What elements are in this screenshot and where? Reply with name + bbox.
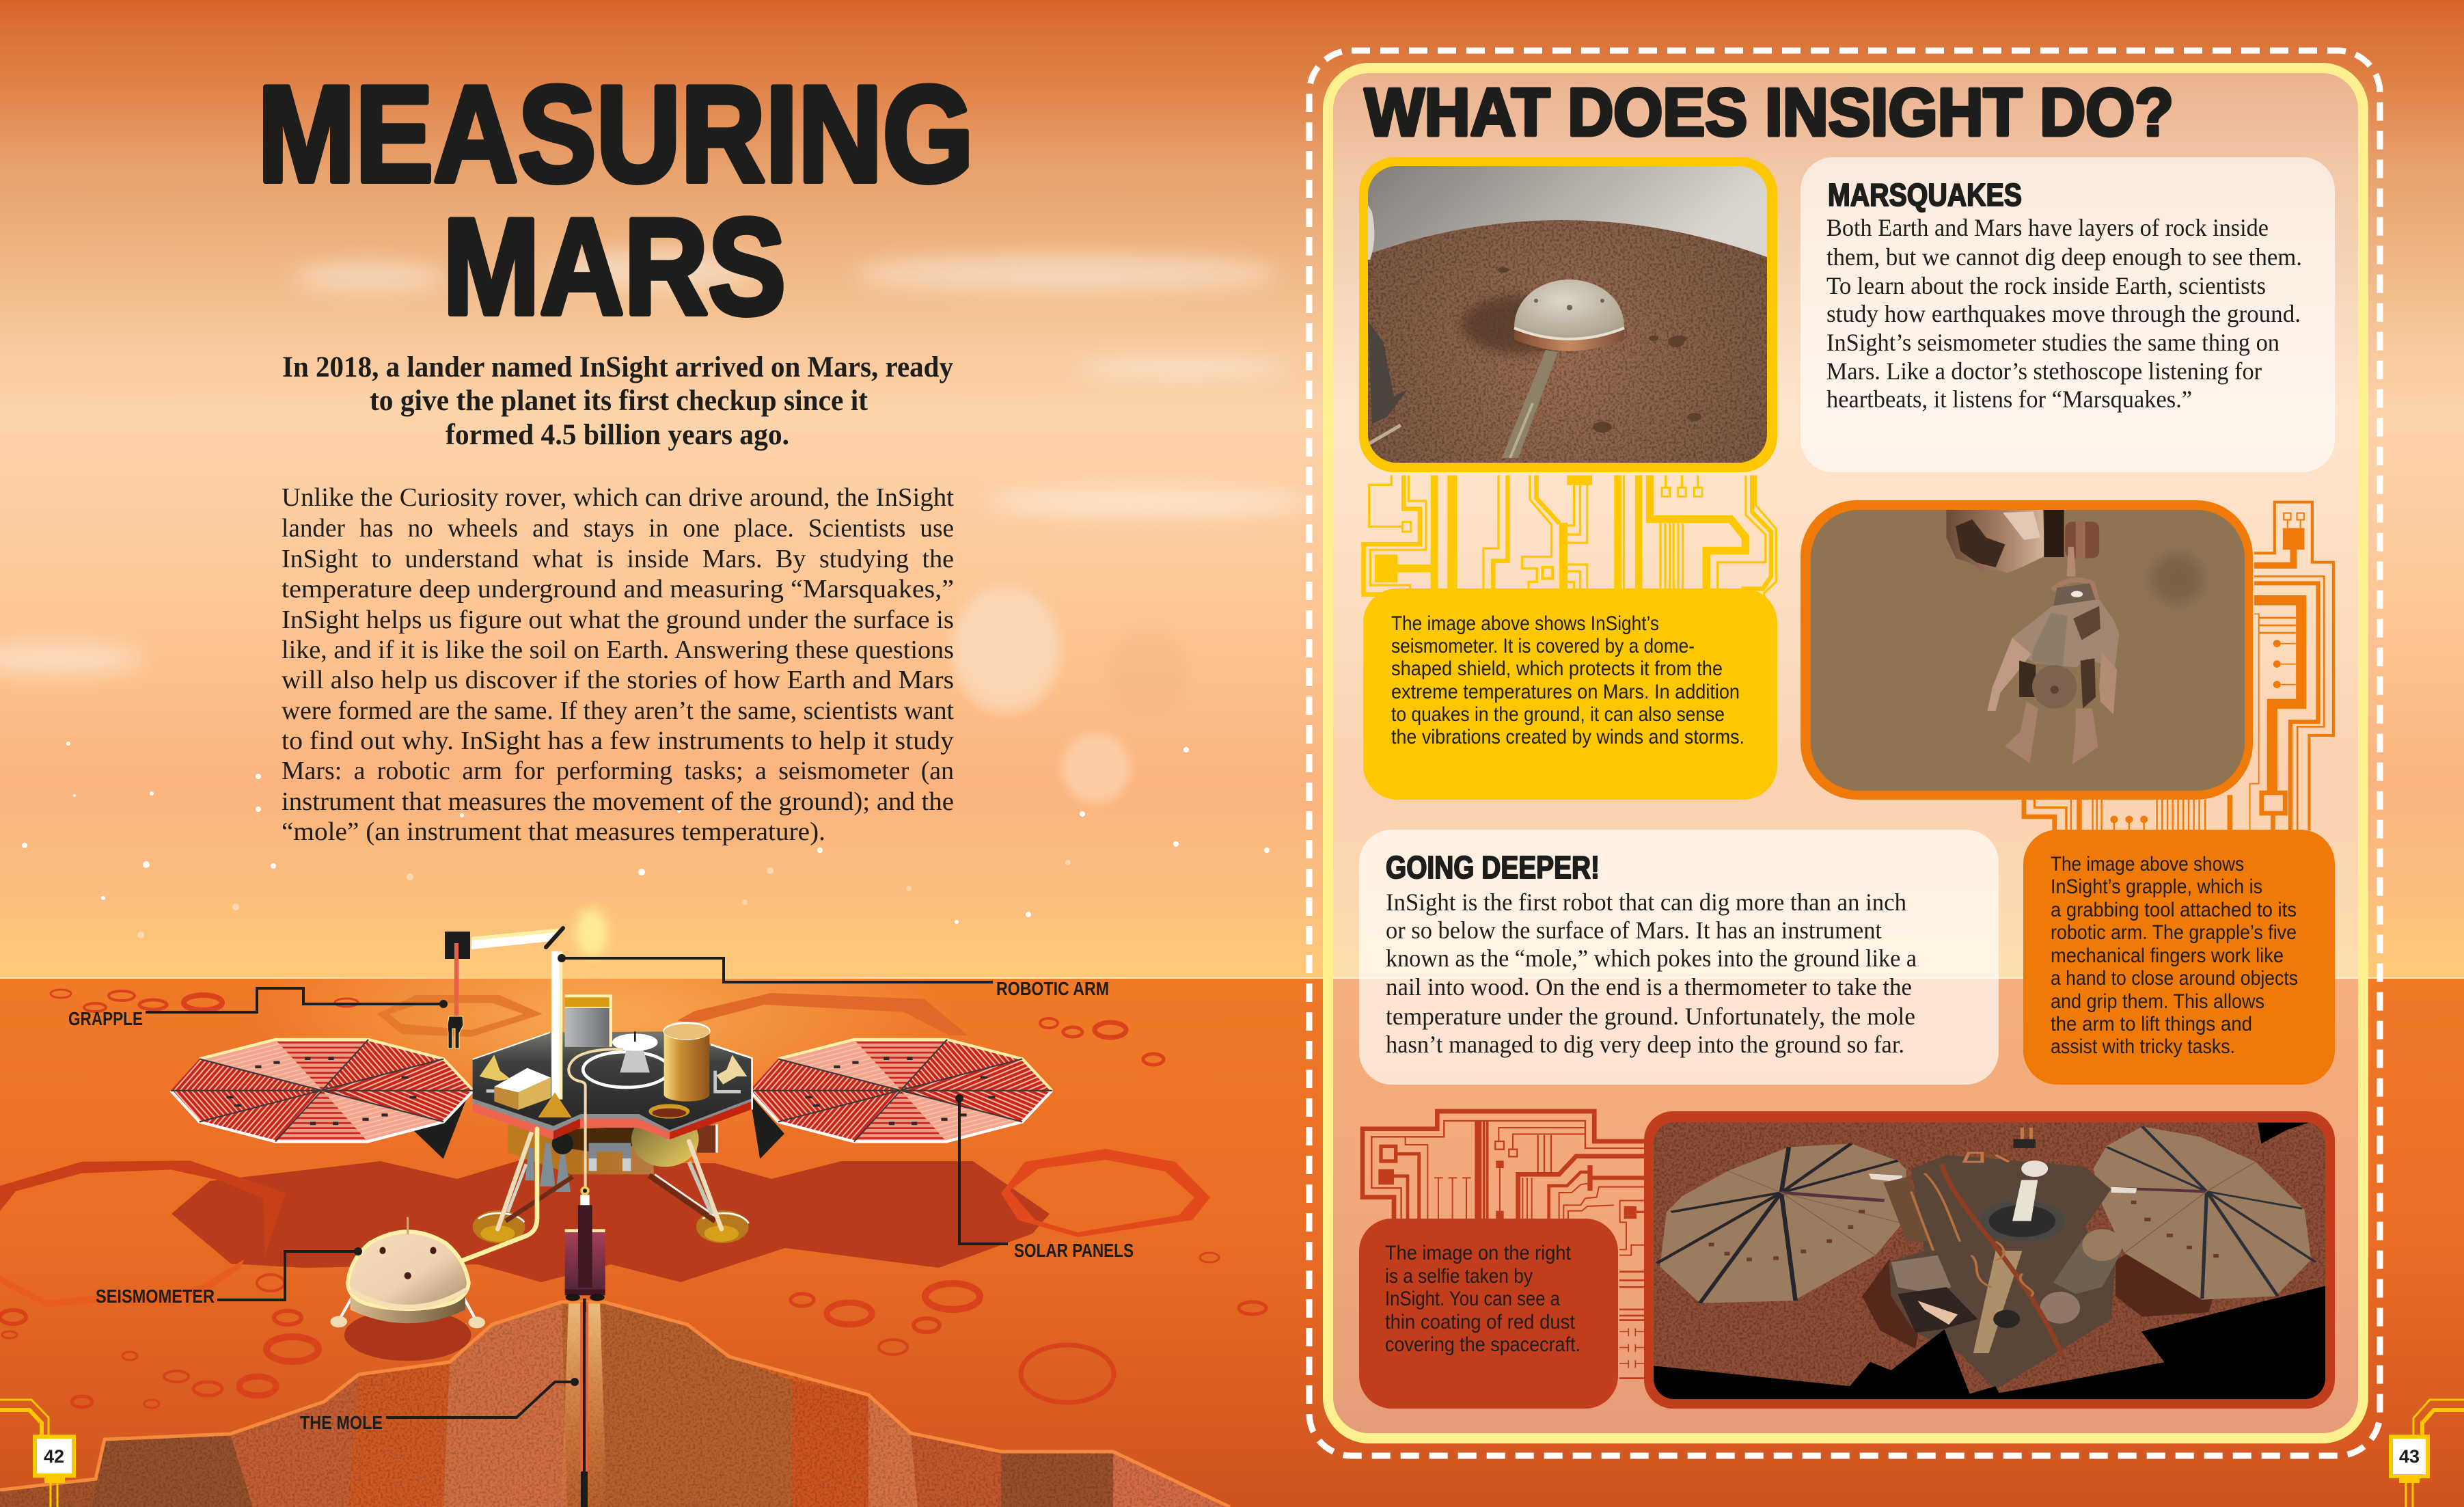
page number 43 — [2391, 1400, 2464, 1507]
card: going deeper: InSight is the first robot that can dig more than an inch — [1386, 888, 1906, 916]
small moons in the sky — [951, 586, 1188, 802]
card: marsquakes: them, but we cannot dig deep enough to see them. — [1826, 243, 2302, 271]
illustration: InSight lander body — [461, 951, 752, 1312]
card: going deeper: hasn’t managed to dig very deep into the ground so far. — [1386, 1031, 1904, 1058]
photo: seismometer on Mars — [1359, 157, 1777, 472]
title: measuring mars: MEASURING — [258, 58, 974, 211]
intro paragraph: formed 4.5 billion years ago. — [446, 419, 789, 451]
robotic arm mast — [538, 951, 572, 1117]
leader dots — [354, 954, 963, 1386]
black gaps in the mosaic — [1654, 1123, 2325, 1401]
clouds — [0, 251, 1312, 675]
label: the mole: THE MOLE — [300, 1412, 383, 1433]
card: going deeper: known as the “mole,” which pokes into the ground like a — [1386, 945, 1917, 972]
caption: selfie: InSight. You can see a — [1385, 1288, 1560, 1310]
title: measuring mars — [258, 58, 974, 343]
body paragraph: to find out why. InSight has a few instruments to help it study — [282, 727, 954, 755]
card: going deeper: temperature under the ground. Unfortunately, the mole — [1386, 1003, 1915, 1030]
caption: selfie: thin coating of red dust — [1385, 1311, 1576, 1333]
body paragraph: Unlike the Curiosity rover, which can drive around, the InSight — [282, 483, 954, 512]
page number 42: 42 — [44, 1446, 64, 1467]
card: marsquakes: MARSQUAKES — [1828, 177, 2022, 213]
hole in deck — [648, 1104, 689, 1119]
label: robotic arm: ROBOTIC ARM — [996, 978, 1109, 999]
caption: seismometer: to quakes in the ground, it can also sense — [1391, 703, 1725, 726]
lander shadow — [172, 1159, 1050, 1282]
body paragraph: InSight to understand what is inside Mars. By studying the — [282, 545, 954, 573]
lander body — [1869, 1128, 2137, 1389]
cylinder — [663, 1022, 711, 1102]
body paragraph: “mole” (an instrument that measures temperature). — [282, 817, 825, 846]
card: marsquakes — [1801, 157, 2335, 472]
card: marsquakes: To learn about the rock inside Earth, scientists — [1826, 272, 2266, 299]
card: going deeper — [1359, 830, 1999, 1085]
caption: grapple: InSight’s grapple, which is — [2051, 875, 2262, 898]
caption: seismometer: seismometer. It is covered by a dome- — [1391, 635, 1695, 657]
right solar array — [2094, 1126, 2316, 1300]
card: marsquakes: study how earthquakes move through the ground. — [1826, 300, 2301, 327]
tether tubes — [461, 1049, 622, 1261]
caption: grapple: a hand to close around objects — [2051, 967, 2298, 990]
card: going deeper: nail into wood. On the end is a thermometer to take the — [1386, 973, 1912, 1001]
illustration: InSight solar panel right — [750, 1040, 1052, 1159]
under-deck housing — [508, 1111, 718, 1174]
body paragraph — [282, 483, 954, 846]
page number 42 — [0, 1400, 74, 1507]
landing legs — [473, 1133, 749, 1243]
sparkling dust — [22, 742, 1270, 938]
caption: grapple: and grip them. This allows — [2051, 990, 2264, 1013]
panel frame — [1328, 68, 2363, 1438]
caption: selfie — [1359, 1219, 1618, 1409]
body paragraph: will also help us discover if the stories of how Earth and Mars — [282, 666, 954, 694]
white block instrument — [494, 1068, 551, 1110]
label: seismometer: SEISMOMETER — [96, 1286, 215, 1307]
caption: grapple: the arm to lift things and — [2051, 1013, 2252, 1035]
card: going deeper: or so below the surface of Mars. It has an instrument — [1386, 917, 1882, 944]
circuit decoration: red — [1363, 1111, 1644, 1379]
grapple tool in photo — [1988, 580, 2119, 764]
underground rock strata — [0, 1299, 1230, 1507]
body paragraph: Mars: a robotic arm for performing tasks; a seismometer (an — [282, 757, 954, 785]
caption: selfie: The image on the right — [1385, 1242, 1572, 1264]
caption: grapple: The image above shows — [2051, 853, 2244, 875]
camera ring and dish — [583, 1031, 670, 1087]
page number 43: 43 — [2399, 1446, 2420, 1467]
caption: seismometer: the vibrations created by winds and storms. — [1391, 726, 1744, 748]
caption: selfie: is a selfie taken by — [1385, 1265, 1533, 1288]
body paragraph: were formed are the same. If they aren’t the same, scientists want — [282, 696, 954, 725]
shadows under spacecraft — [1862, 1253, 2213, 1348]
intro paragraph: In 2018, a lander named InSight arrived on Mars, ready — [282, 351, 953, 383]
label: grapple: GRAPPLE — [68, 1008, 143, 1029]
caption: grapple: a grabbing tool attached to its — [2051, 899, 2297, 921]
body paragraph: instrument that measures the movement of the ground); and the — [282, 787, 954, 816]
body paragraph: lander has no wheels and stays in one place. Scientists use — [282, 514, 954, 543]
caption: grapple: mechanical fingers work like — [2051, 945, 2284, 967]
the mole probe in the ground — [580, 1299, 588, 1507]
large craters — [0, 993, 1210, 1307]
body paragraph: like, and if it is like the soil on Earth. Answering these questions — [282, 636, 954, 664]
caption: selfie: covering the spacecraft. — [1385, 1333, 1580, 1356]
circuit decoration: yellow — [1364, 476, 1776, 618]
caption: seismometer: extreme temperatures on Mars. In addition — [1391, 681, 1740, 703]
panel dashed border — [1309, 51, 2380, 1456]
panel: what does insight do — [1309, 51, 2380, 1456]
panel heading: WHAT DOES INSIGHT DO? — [1365, 74, 2174, 150]
craters — [0, 990, 1266, 1408]
deck — [473, 994, 752, 1139]
body paragraph: temperature deep underground and measuring “Marsquakes,” — [282, 575, 954, 603]
card: marsquakes: Both Earth and Mars have layers of rock inside — [1826, 214, 2269, 241]
caption: grapple: robotic arm. The grapple’s five — [2051, 921, 2297, 944]
card: going deeper: GOING DEEPER! — [1386, 850, 1600, 885]
caption: grapple: assist with tricky tasks. — [2051, 1035, 2235, 1058]
leader lines — [146, 958, 1008, 1417]
seismometer illustration — [330, 1217, 485, 1361]
label: solar panels: SOLAR PANELS — [1014, 1240, 1134, 1261]
caption: seismometer: The image above shows InSight’s — [1391, 612, 1659, 635]
sun glow behind arm — [575, 908, 608, 958]
robotic arm upper boom and grapple — [445, 928, 563, 1048]
circuit decoration: orange — [2024, 502, 2333, 830]
photo: InSight selfie — [1644, 1111, 2335, 1409]
robotic arm elbow in photo — [1946, 510, 2099, 576]
mole support structure — [565, 1186, 605, 1312]
card: marsquakes: InSight’s seismometer studies the same thing on — [1826, 329, 2280, 356]
left solar array — [1657, 1143, 1906, 1303]
illustration: InSight solar panel left — [171, 1040, 474, 1159]
caption: grapple — [2023, 830, 2335, 1085]
caption: seismometer: shaped shield, which protects it from the — [1391, 657, 1723, 680]
thrusters — [525, 1133, 573, 1192]
photo: grapple — [1801, 500, 2253, 800]
body paragraph: InSight helps us figure out what the ground under the surface is — [282, 606, 954, 634]
intro paragraph — [282, 351, 953, 451]
title: measuring mars: MARS — [443, 191, 786, 343]
caption: seismometer — [1363, 588, 1777, 800]
intro paragraph: to give the planet its first checkup since it — [370, 385, 868, 417]
background: martian sky — [0, 0, 2464, 979]
card: marsquakes: Mars. Like a doctor’s stethoscope listening for — [1826, 357, 2262, 385]
brackets and horns — [480, 1055, 747, 1093]
card: marsquakes: heartbeats, it listens for “Marsquakes.” — [1826, 385, 2192, 413]
martian ground — [0, 977, 2464, 1507]
